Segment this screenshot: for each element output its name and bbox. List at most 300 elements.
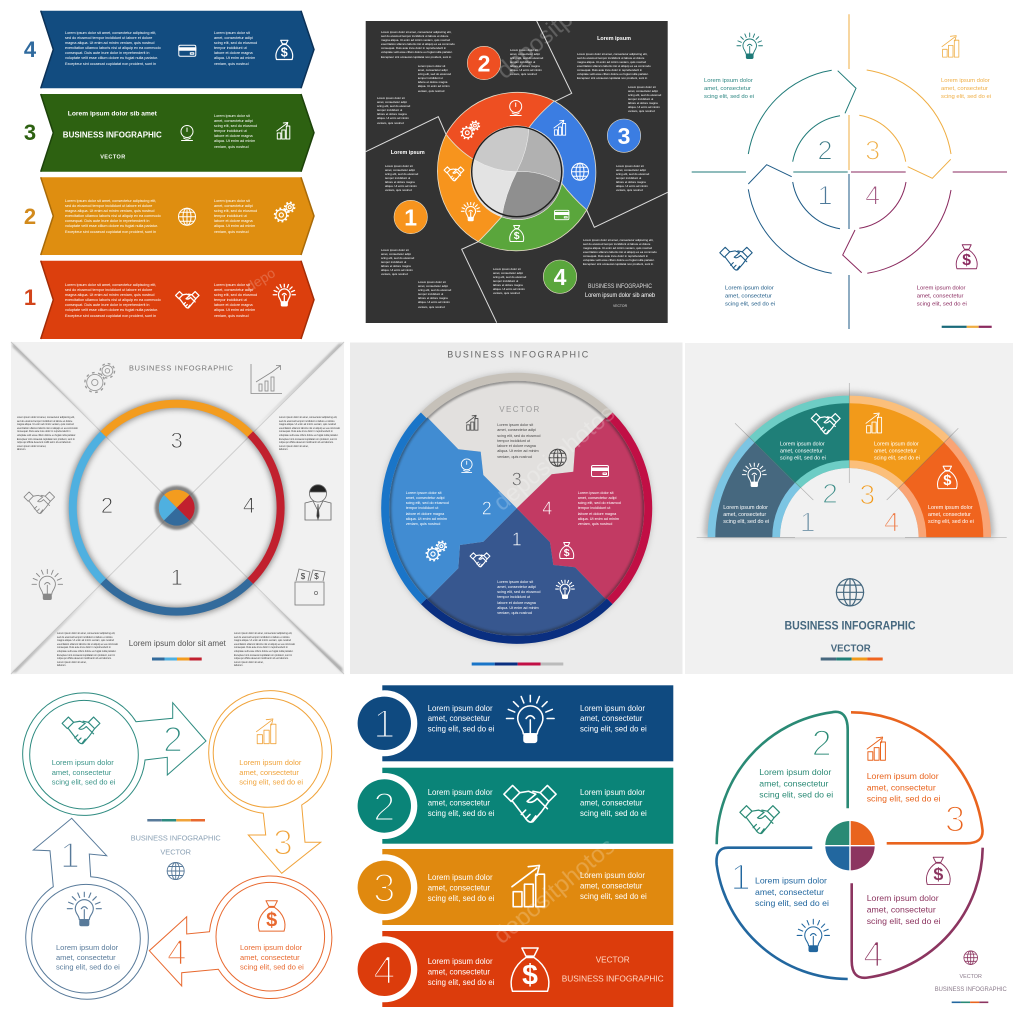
icon: credit card	[179, 45, 196, 56]
text block: consequat. Duis aute irure dolor in reprehenderit in	[65, 51, 149, 55]
text block bottom right: Lorem ipsum dolor sit amet,	[234, 661, 264, 664]
text block: Lorem ipsum dolor sit	[214, 31, 250, 35]
text block: veniam, quis nostrud	[628, 109, 655, 113]
number 3: 3	[865, 136, 880, 166]
text block bottom: scing elit, sed do eiusmod	[497, 590, 540, 594]
text block: scing elit, sed do eiusmod	[385, 172, 418, 176]
text block	[510, 48, 550, 78]
text left: amet, consectetur	[428, 714, 490, 723]
text block: labore et dolore magna	[214, 219, 253, 223]
number 1: 1	[171, 565, 183, 590]
icon: globe	[178, 208, 196, 225]
arrow row 2	[24, 177, 314, 255]
text block: voluptate velit esse cillum dolore eu fugiat nulla pariatur.	[65, 308, 158, 312]
text block: tempor incididunt ut	[616, 176, 641, 180]
text 2: scing elit, sed do ei	[704, 94, 754, 100]
text block: veniam, quis nostrud	[616, 188, 643, 192]
icon: clock	[181, 126, 193, 140]
center pie	[155, 486, 199, 530]
text block bottom left: voluptate velit esse cillum dolore eu fugiat nulla pariatur.	[57, 650, 116, 653]
icon: card	[592, 466, 608, 476]
quadrant 2 outline	[717, 712, 848, 844]
badge 2: 2	[478, 50, 490, 76]
icon: chart	[554, 120, 566, 135]
number 2: 2	[373, 785, 395, 829]
donut sectors	[437, 92, 596, 251]
text left: amet, consectetur	[428, 884, 490, 892]
text block: aliqua. Ut enim ad minim	[381, 268, 413, 272]
text block right: amet, consectetur adipi	[578, 496, 616, 500]
text block: amet, consectetur adipi	[214, 119, 253, 123]
text block bottom right: sed do eiusmod tempor incididunt ut labore et dolore	[234, 636, 290, 639]
text block: exercitation ullamco laboris nisi ut aliquip ex ea commodo	[65, 214, 161, 218]
icon: person	[305, 485, 331, 520]
text block: veniam, quis nostrud	[214, 314, 249, 318]
text block	[628, 84, 666, 114]
text block	[214, 283, 264, 320]
quadrant 4 outline	[852, 848, 983, 978]
text block bottom: tempor incididunt ut	[497, 595, 530, 599]
icon: clock	[461, 459, 472, 472]
text block left: culpa qui officia deserunt mollit anim id est laborum.	[17, 441, 72, 444]
badge 2	[467, 46, 501, 80]
text 2: amet, consectetur	[780, 449, 823, 455]
text 3: amet, consectetur	[239, 768, 299, 777]
text block left: exercitation ullamco laboris nisi ut aliquip ex ea commodo	[17, 427, 78, 430]
text block left: tempor incididunt ut	[406, 506, 438, 510]
text 3: amet, consectetur	[874, 449, 917, 455]
number 1: 1	[512, 530, 522, 550]
text block: labore et dolore magna	[616, 180, 646, 184]
text block right: Lorem ipsum dolor sit	[578, 490, 614, 494]
text 3: scing elit, sed do ei	[867, 794, 941, 804]
text block: labore et dolore magna	[214, 134, 253, 138]
text block: scing elit, sed do eiusmod	[616, 172, 649, 176]
text 1: amet, consectetur	[56, 953, 116, 962]
icon: chart	[512, 865, 544, 907]
text block: Excepteur sint occaecat cupidatat non proident, sunt in	[65, 230, 156, 234]
number 2: 2	[24, 204, 36, 229]
text block: scing elit, sed do eiusmod	[418, 72, 451, 76]
text block right: scing elit, sed do eiusmod	[578, 501, 621, 505]
text block: tempor incididunt ut	[214, 214, 247, 218]
text block: sed do eiusmod tempor incididunt ut labore et dolore	[65, 36, 152, 40]
text block: amet, consectetur adipi	[510, 52, 540, 56]
icon: chart	[251, 364, 282, 394]
number 2: 2	[822, 478, 838, 509]
text block: Excepteur sint occaecat cupidatat non proident, sunt in	[583, 262, 653, 266]
text block: Lorem ipsum dolor sit	[385, 164, 413, 168]
text block: consequat. Duis aute irure dolor in reprehenderit in	[65, 219, 149, 223]
text block	[65, 283, 165, 320]
text block: veniam, quis nostrud	[493, 291, 520, 295]
icon: gears	[85, 364, 115, 392]
text block: sed do eiusmod tempor incididunt ut labore et dolore	[65, 204, 152, 208]
number 3: 3	[171, 428, 183, 453]
caption: VECTOR	[613, 304, 628, 308]
text block: tempor incididunt ut	[214, 129, 247, 133]
number 3: 3	[945, 798, 965, 839]
legend bar	[942, 326, 992, 328]
text left: scing elit, sed do ei	[428, 724, 495, 733]
text block	[214, 31, 264, 68]
number 3: 3	[24, 120, 36, 145]
icon: handshake	[811, 414, 840, 434]
icon: gears	[275, 202, 294, 222]
text block left: labore et dolore magna	[406, 512, 444, 516]
text block: voluptate velit esse cillum dolore eu fugiat nulla pariatur.	[577, 72, 649, 76]
text block bottom left: laborum.	[57, 664, 66, 667]
text block right	[578, 490, 628, 528]
text block	[65, 199, 165, 236]
arrow row 1	[24, 261, 314, 339]
text block top: tempor incididunt ut	[497, 439, 530, 443]
text block: amet, consectetur adipi	[628, 89, 658, 93]
text block: labore et dolore magna	[418, 296, 448, 300]
text block: aliqua. Ut enim ad minim	[214, 224, 255, 228]
text block bottom left: culpa qui officia deserunt mollit anim id est laborum.	[57, 657, 112, 660]
text block left: scing elit, sed do eiusmod	[406, 501, 449, 505]
text block	[214, 114, 264, 151]
icon: globe	[964, 951, 978, 964]
text block: scing elit, sed do eiusmod	[418, 288, 451, 292]
text block: veniam, quis nostrud	[418, 89, 444, 93]
text 3: scing elit, sed do ei	[239, 778, 303, 787]
text 1: scing elit, sed do ei	[723, 519, 769, 525]
text 3: Lorem ipsum dolor	[874, 442, 919, 448]
text 2: amet, consectetur	[759, 778, 828, 788]
subheading: VECTOR	[831, 643, 871, 654]
subheading: VECTOR	[499, 405, 540, 414]
number 1: 1	[731, 857, 751, 898]
text block: aliqua. Ut enim ad minim	[616, 184, 648, 188]
text 1: amet, consectetur	[725, 293, 772, 299]
heading: BUSINESS INFOGRAPHIC	[63, 130, 162, 140]
heading: BUSINESS INFOGRAPHIC	[588, 284, 653, 290]
text block bottom left: Lorem ipsum dolor sit amet,	[57, 661, 86, 664]
heading: BUSINESS INFOGRAPHIC	[935, 986, 1007, 993]
heading: BUSINESS INFOGRAPHIC	[447, 350, 589, 360]
text left: Lorem ipsum dolor	[428, 704, 493, 713]
text block right: veniam, quis nostrud	[578, 522, 612, 526]
icon: handshake	[504, 785, 556, 822]
text block bottom right: culpa qui officia deserunt mollit anim id est laborum.	[234, 657, 289, 660]
text block top: amet, consectetur adipi	[497, 428, 536, 432]
text block bottom: amet, consectetur adipi	[497, 585, 536, 589]
text block: amet, consectetur adipi	[214, 288, 253, 292]
text block: aliqua. Ut enim ad minim	[214, 308, 255, 312]
text block: magna aliqua. Ut enim ad minim veniam, quis nostrud	[577, 60, 646, 64]
segment 1 outline	[748, 165, 849, 329]
text block: tempor incididunt ut	[418, 292, 443, 296]
icon: globe	[549, 449, 566, 466]
text block bottom: labore et dolore magna	[497, 601, 536, 605]
text block bottom right: voluptate velit esse cillum dolore eu fugiat nulla pariatur.	[234, 650, 293, 653]
heading: BUSINESS INFOGRAPHIC	[562, 973, 664, 983]
text left: Lorem ipsum dolor	[428, 788, 493, 797]
text block: exercitation ullamco laboris nisi ut aliquip ex ea commodo	[381, 42, 455, 46]
text block: labore et dolore magna	[493, 283, 523, 287]
icon: money bag	[938, 466, 957, 489]
banner 3	[351, 849, 673, 925]
text block: Excepteur sint occaecat cupidatat non proident, sunt in	[65, 62, 156, 66]
text block top: aliqua. Ut enim ad minim	[497, 449, 539, 453]
text block right	[279, 416, 343, 454]
text block bottom right: laborum.	[234, 664, 243, 667]
text block bottom right: exercitation ullamco laboris nisi ut aliquip ex ea commodo	[234, 643, 295, 646]
text block left: Lorem ipsum dolor sit amet,	[17, 445, 46, 448]
text block: magna aliqua. Ut enim ad minim veniam, quis nostrud	[65, 293, 154, 297]
text block right: culpa qui officia deserunt mollit anim id est laborum.	[279, 441, 334, 444]
text block: Lorem ipsum dolor sit amet, consectetur adipiscing elit,	[577, 52, 647, 56]
text block: veniam, quis nostrud	[381, 272, 408, 276]
icon: bulb	[797, 919, 829, 952]
ring segments	[73, 404, 281, 612]
text block bottom left: Lorem ipsum dolor sit amet, consectetur adipiscing elit,	[57, 632, 115, 635]
text block: sed do eiusmod tempor incididunt ut labore et dolore	[65, 288, 152, 292]
text left: scing elit, sed do ei	[428, 894, 495, 903]
text block: Lorem ipsum dolor sit	[214, 114, 250, 118]
text block: Lorem ipsum dolor sit	[381, 248, 409, 252]
text block: aliqua. Ut enim ad minim	[377, 116, 409, 120]
text block right: consequat. Duis aute irure dolor in reprehenderit in	[279, 430, 333, 433]
text 2: scing elit, sed do ei	[52, 778, 116, 787]
text block bottom: veniam, quis nostrud	[497, 611, 532, 615]
icon: gears	[461, 121, 479, 139]
text block: voluptate velit esse cillum dolore eu fugiat nulla pariatur.	[583, 258, 655, 262]
text block: voluptate velit esse cillum dolore eu fugiat nulla pariatur.	[65, 224, 158, 228]
outer ring	[385, 377, 648, 640]
text block: magna aliqua. Ut enim ad minim veniam, quis nostrud	[65, 41, 154, 45]
number 3: 3	[273, 824, 293, 863]
icon: chart	[277, 122, 290, 139]
divider lines	[366, 21, 668, 323]
legend bar	[952, 1002, 988, 1003]
badge 4: 4	[554, 264, 567, 290]
number 2: 2	[163, 721, 183, 760]
text block right: magna aliqua. Ut enim ad minim veniam, quis nostrud	[279, 423, 336, 426]
text block top: veniam, quis nostrud	[497, 455, 532, 459]
text block: tempor incididunt ut	[418, 76, 443, 80]
icon: clock	[510, 100, 522, 116]
text block: aliqua. Ut enim ad minim	[418, 84, 450, 88]
text right: amet, consectetur	[580, 882, 643, 890]
text block: Lorem ipsum dolor sit amet, consectetur adipiscing elit,	[65, 199, 156, 203]
text block: scing elit, sed do eiusmod	[377, 104, 410, 108]
subheading: Lorem ipsum dolor sib ameb	[585, 293, 656, 299]
panel: semicircle chart	[685, 343, 1013, 674]
text 1: amet, consectetur	[723, 512, 766, 518]
text block right: labore et dolore magna	[578, 512, 616, 516]
text block: veniam, quis nostrud	[418, 305, 445, 309]
text block left: Excepteur sint occaecat cupidatat non proident, sunt in	[17, 438, 75, 441]
icon: chart	[942, 36, 959, 57]
text 3: Lorem ipsum dolor	[941, 78, 990, 84]
text block: Lorem ipsum dolor sit	[616, 164, 644, 168]
text block left: sed do eiusmod tempor incididunt ut labore et dolore	[17, 420, 72, 423]
text block: sed do eiusmod tempor incididunt ut labore et dolore	[577, 56, 644, 60]
text block left: Lorem ipsum dolor sit	[406, 490, 442, 494]
section shapes	[389, 380, 644, 636]
text 2: amet, consectetur	[704, 86, 751, 92]
segment 3 outline	[849, 14, 951, 178]
text block bottom right: magna aliqua. Ut enim ad minim veniam, quis nostrud	[234, 639, 291, 642]
text block: Lorem ipsum dolor sit amet, consectetur adipiscing elit,	[381, 30, 451, 34]
circle and arrow 1	[26, 818, 148, 999]
text block: aliqua. Ut enim ad minim	[214, 139, 255, 143]
text right: Lorem ipsum dolor	[580, 871, 645, 880]
quadrant 3 outline	[851, 712, 983, 843]
legend bar	[821, 658, 883, 660]
text block: labore et dolore magna	[214, 51, 253, 55]
text 4: amet, consectetur	[867, 905, 936, 915]
text block	[214, 199, 264, 236]
text block: Excepteur sint occaecat cupidatat non proident, sunt in	[381, 55, 451, 59]
text 4: Lorem ipsum dolor	[240, 943, 303, 952]
section 1	[708, 437, 800, 537]
text block right: voluptate velit esse cillum dolore eu fugiat nulla pariatur.	[279, 434, 338, 437]
number 4: 4	[863, 933, 883, 974]
text block bottom left: magna aliqua. Ut enim ad minim veniam, quis nostrud	[57, 639, 114, 642]
section 3	[849, 396, 950, 488]
text block: magna aliqua. Ut enim ad minim veniam, quis nostrud	[583, 246, 652, 250]
text 4: Lorem ipsum dolor	[867, 893, 939, 903]
text 1: scing elit, sed do ei	[725, 301, 775, 307]
number 3: 3	[512, 470, 522, 490]
text block: Lorem ipsum dolor sit	[214, 283, 250, 287]
dividers	[697, 383, 1007, 537]
text block: Excepteur sint occaecat cupidatat non proident, sunt in	[65, 314, 156, 318]
text 1: amet, consectetur	[755, 887, 824, 897]
text block: veniam, quis nostrud	[214, 230, 249, 234]
number 4: 4	[865, 181, 880, 211]
text block bottom left: Excepteur sint occaecat cupidatat non proident, sunt in	[57, 654, 115, 657]
section 4	[898, 437, 991, 537]
segment 2 outline	[692, 70, 856, 172]
watermark text	[243, 0, 623, 950]
text block: scing elit, sed do eiusmod	[628, 93, 661, 97]
legend bar	[147, 819, 205, 822]
text 1: Lorem ipsum dolor	[56, 943, 119, 952]
number 4: 4	[167, 933, 186, 972]
text block left: voluptate velit esse cillum dolore eu fugiat nulla pariatur.	[17, 434, 76, 437]
badge 3	[607, 119, 641, 152]
text block: tempor incididunt ut	[381, 260, 406, 264]
text block: consequat. Duis aute irure dolor in reprehenderit in	[381, 46, 446, 50]
text block: amet, consectetur adipi	[381, 252, 411, 256]
text block left: laborum.	[17, 448, 26, 451]
text block top	[497, 423, 547, 461]
text block: tempor incididunt ut	[510, 60, 535, 64]
text block: labore et dolore magna	[418, 80, 447, 84]
text block: Lorem ipsum dolor sit	[377, 96, 405, 100]
icon: chart	[466, 415, 478, 430]
text 2: scing elit, sed do ei	[759, 790, 833, 800]
text block right: aliqua. Ut enim ad minim	[578, 517, 619, 521]
panel: numbered arrows	[24, 11, 314, 339]
icon: bulb	[32, 569, 63, 600]
text block: labore et dolore magna	[628, 101, 658, 105]
text block top: Lorem ipsum dolor sit	[497, 423, 533, 427]
text block: amet, consectetur adipi	[377, 100, 407, 104]
text block: aliqua. Ut enim ad minim	[628, 105, 660, 109]
icon: gears	[426, 541, 446, 561]
text block: Lorem ipsum dolor sit	[628, 84, 656, 88]
text block: amet, consectetur adipi	[385, 168, 415, 172]
disc shadow	[381, 372, 653, 644]
text block left: Lorem ipsum dolor sit amet, consectetur adipiscing elit,	[17, 416, 75, 419]
number 2: 2	[817, 136, 833, 166]
text right: amet, consectetur	[580, 798, 643, 808]
number 1: 1	[24, 285, 36, 310]
text block left: veniam, quis nostrud	[406, 522, 440, 526]
panel: line-art target diagram	[692, 14, 1007, 329]
text block: labore et dolore magna	[381, 264, 411, 268]
text block: voluptate velit esse cillum dolore eu fugiat nulla pariatur.	[65, 56, 158, 60]
text block: consequat. Duis aute irure dolor in reprehenderit in	[65, 303, 149, 307]
text 1: Lorem ipsum dolor	[725, 286, 774, 292]
watermark text: depositphotos	[489, 833, 620, 950]
label: Lorem ipsum	[597, 36, 631, 42]
icon: handshake	[470, 553, 490, 567]
text block	[381, 248, 421, 278]
text block: sed do eiusmod tempor incididunt ut labore et dolore	[381, 34, 448, 38]
text block: aliqua. Ut enim ad minim	[418, 300, 450, 304]
text right: amet, consectetur	[580, 714, 643, 723]
icon: wallet: $	[314, 572, 319, 581]
icon: bulb	[556, 580, 574, 598]
subheading: VECTOR	[100, 154, 125, 160]
subheading: Lorem ipsum dolor sit amet	[129, 639, 227, 648]
text 1: scing elit, sed do ei	[56, 963, 120, 972]
text block: amet, consectetur adipi	[616, 168, 646, 172]
text block: Lorem ipsum dolor sit amet, consectetur adipiscing elit,	[65, 283, 156, 287]
text block left: amet, consectetur adipi	[406, 496, 444, 500]
text block	[385, 164, 425, 194]
number 2: 2	[101, 493, 113, 518]
text 1: Lorem ipsum dolor	[755, 876, 827, 886]
text block right: exercitation ullamco laboris nisi ut aliquip ex ea commodo	[279, 427, 340, 430]
text block: veniam, quis nostrud	[377, 121, 404, 125]
corner shadows	[12, 343, 343, 673]
icon: money bag	[510, 226, 524, 242]
heading: BUSINESS INFOGRAPHIC	[131, 833, 221, 842]
text 4: scing elit, sed do ei	[917, 301, 967, 307]
text block right: sed do eiusmod tempor incididunt ut labore et dolore	[279, 420, 335, 423]
text left: Lorem ipsum dolor	[428, 957, 493, 966]
text block	[616, 164, 656, 194]
text 2: amet, consectetur	[52, 768, 112, 777]
text block: amet, consectetur adipi	[214, 204, 253, 208]
icon: money bag	[926, 857, 950, 884]
text block: veniam, quis nostrud	[214, 62, 249, 66]
inner clear area	[780, 468, 919, 537]
quadrant 1 outline	[717, 848, 848, 979]
arch shadow	[704, 392, 994, 537]
text block	[65, 31, 165, 68]
segment 4 outline	[843, 172, 1007, 273]
text right: scing elit, sed do ei	[580, 724, 647, 733]
diagonal dividers	[11, 342, 344, 674]
icon: card	[554, 210, 569, 220]
text block: scing elit, sed do eiusmod	[214, 293, 257, 297]
text block: sed do eiusmod tempor incididunt ut labore et dolore	[583, 242, 650, 246]
text block bottom left: exercitation ullamco laboris nisi ut aliquip ex ea commodo	[57, 643, 118, 646]
text 1: scing elit, sed do ei	[755, 898, 829, 908]
heading: BUSINESS INFOGRAPHIC	[129, 364, 234, 372]
icon: bulb	[461, 202, 480, 221]
center pie	[824, 820, 876, 872]
